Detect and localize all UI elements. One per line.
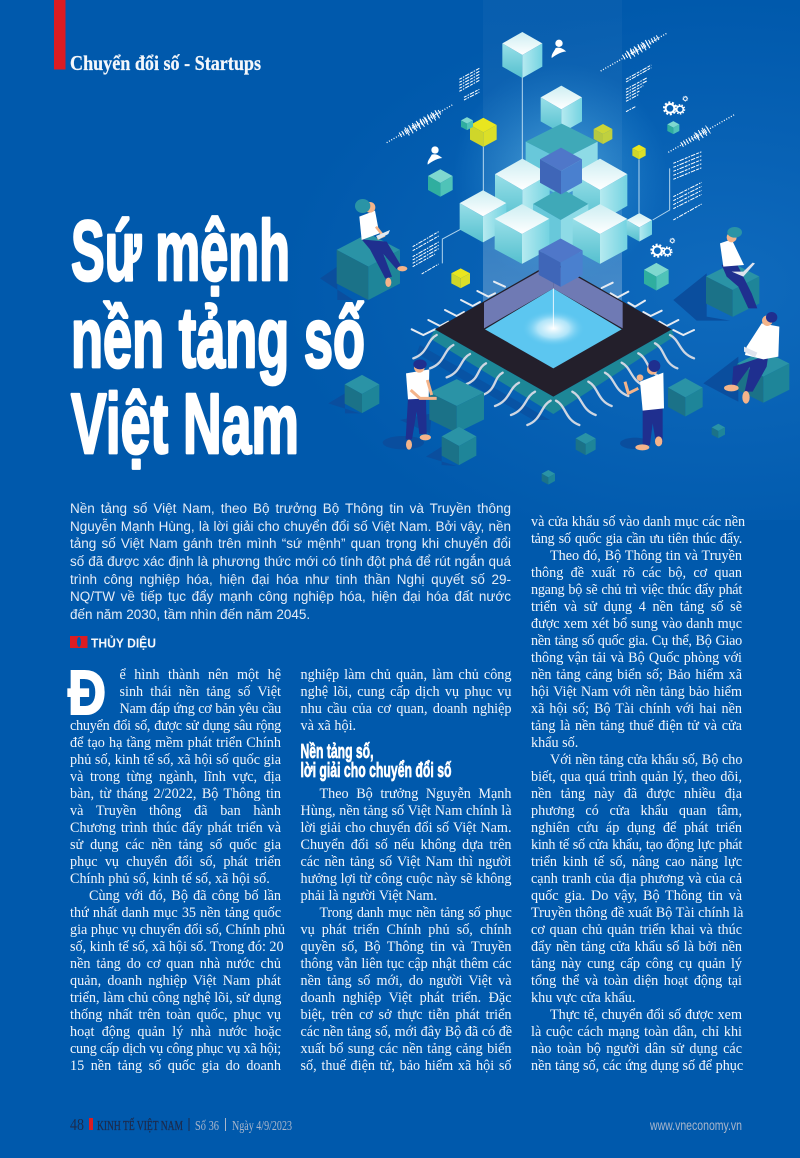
intro text: Nền tảng số Việt Nam, theo Bộ trưởng Bộ Thông tin và Truyền thông (70, 501, 511, 516)
intro text: đến năm 2030, tầm nhìn đến năm 2045. (70, 607, 310, 622)
body column 2, bottom: thông vẫn liên tục cập nhật thêm các (300, 956, 512, 972)
body column 1: bàn, từ tháng 2/2022, Bộ Thông tin (70, 786, 281, 802)
body column 3: tảng số quốc gia cần ưu tiên thúc đẩy. (531, 531, 742, 547)
body column 3: Theo đó, Bộ Thông tin và Truyền (550, 548, 742, 564)
chip glowing floor (485, 288, 622, 368)
floating cube: second (541, 86, 582, 133)
body column 3: xã hội số; Bộ Tài chính với hai nền (531, 701, 742, 717)
body column 2, bottom: phải là người Việt Nam. (300, 888, 437, 904)
body column 1: thống nhất trên toàn quốc, phục vụ (70, 1007, 281, 1023)
body column 1: nền tảng do cơ quan nhà nước chủ (70, 956, 281, 972)
body column 1: số, kinh tế số, xã hội số. Trong đó: 20 (70, 939, 284, 955)
green cube right small (667, 121, 679, 134)
intro text: trình công nghiệp hóa, hiện đại hóa như tinh thần Nghị quyết số 29- (70, 572, 511, 587)
body column 2, bottom: số, thuế điện tử, bảo hiểm xã hội số (300, 1058, 512, 1074)
background glow (0, 0, 800, 520)
body column 2, bottom: xuất bổ sung các nền tảng cảng biển (300, 1041, 512, 1057)
main title: Việt Nam (71, 377, 299, 472)
lime cube right (594, 124, 612, 144)
body column 2, top: và xã hội. (300, 718, 356, 734)
light beam (483, 0, 622, 330)
chip pins, bottom (413, 335, 694, 425)
body column 1: triển, làm chủ công nghệ lõi, sử dụng (70, 990, 281, 1006)
body column 2, bottom: biệt, trên cơ sở thực tiễn phát triển (300, 1007, 512, 1023)
body column 3: kinh tế số cửa khẩu, tạo động lực phát (531, 837, 742, 853)
front left cube (495, 204, 549, 264)
subheading: Nền tảng số, (300, 741, 374, 763)
body column 1: phục vụ chuyển đổi số, phát triển (70, 854, 281, 870)
person seated, far right (703, 312, 789, 404)
body column 3: đẩy nền tảng cửa khẩu số là bởi nền (531, 939, 742, 955)
body column 1: sử dụng các nền tảng số quốc gia (70, 837, 281, 853)
body column 1: Nam đáp ứng cơ bản yêu cầu (120, 701, 281, 717)
body column 1: Chính phủ số, kinh tế số, xã hội số. (70, 871, 270, 887)
body column 3: triển kinh tế số, nâng cao năng lực (531, 854, 742, 870)
body column 1: thứ nhất danh mục 35 nền tảng quốc (70, 905, 281, 921)
body column 2, top: nghiệp làm chủ quản, làm chủ công (300, 667, 512, 683)
body column 3: nghiên cứu áp dụng để phát triển (531, 820, 742, 836)
intro text: Nguyễn Mạnh Hùng, là lời giải cho chuyển đổi số Việt Nam. Bởi vậy, nền (70, 519, 511, 534)
body column 1: sinh thái nền tảng số Việt (120, 684, 281, 700)
body column 3: biết, qua quá trình quản lý, theo dõi, (531, 769, 742, 785)
body column 3: thông đề xuất rõ các bộ, cơ quan (531, 565, 742, 581)
chip base (430, 329, 674, 414)
body column 2, bottom: các nền tảng số Việt Nam thì người (300, 854, 512, 870)
body column 2, bottom: lời giải cho chuyển đổi số Việt Nam. (300, 820, 512, 836)
intro text (70, 501, 511, 622)
body column 3: Với nền tảng cửa khẩu số, Bộ cho (550, 752, 742, 768)
purple walls (484, 263, 553, 328)
intro text: NQ/TW về tiếp tục đẩy mạnh công nghiệp hóa, hiện đại hóa đất nước (70, 589, 511, 604)
footer: Số 36 (195, 1119, 219, 1134)
drop cap: Đ (68, 659, 106, 728)
body column 3: và cửa khẩu số vào danh mục các nền (531, 514, 745, 530)
main title: nền tảng số (71, 291, 365, 386)
body column 1: Cùng với đó, Bộ đã công bố lần (89, 888, 281, 904)
connector lines (442, 77, 670, 263)
body column 3 (531, 514, 745, 1074)
red section bar (54, 0, 66, 70)
chip top (435, 262, 672, 397)
floating cube: top (502, 32, 542, 78)
body column 3: là cuộc cách mạng toàn dân, chỉ khi (531, 1024, 742, 1040)
body column 3: nền tảng này đã được nhiều địa (531, 786, 742, 802)
body column 2, bottom: doanh nghiệp Việt phát triển. Đặc (300, 990, 512, 1006)
body column 2, bottom: vụ phát triển Chính phủ số, chính (300, 922, 512, 938)
green cube left (428, 169, 453, 197)
yellow hex cube (470, 118, 497, 147)
body column 3: Thực tế, chuyển đổi số được xem (550, 1007, 742, 1023)
body column 1: hoạt động quản lý nhà nước hoặc (70, 1024, 281, 1040)
body column 2, bottom: hưởng lợi từ công cuộc này sẽ không (300, 871, 512, 887)
body column 1: và Truyền thông đã ban hành (70, 803, 281, 819)
person on cube with laptop, right (673, 227, 759, 321)
body column 1: chuyển đổi số, được sử dụng sâu rộng (70, 718, 281, 734)
blue cube lower (539, 239, 583, 287)
body column 2, bottom: Hùng, nền tảng số Việt Nam chính là (300, 803, 512, 819)
body column 3: Truyền thông đề xuất Bộ Tài chính là (531, 905, 743, 921)
body column 3: khu vực cửa khẩu. (531, 990, 635, 1006)
body column 3: nào toàn bộ người dân sử dụng các (531, 1041, 742, 1057)
data waves (387, 33, 735, 152)
body column 3: triển và sử dụng 4 nền tảng số sẽ (531, 599, 742, 615)
body column 3: nền tảng số, các ứng dụng số để phục (531, 1058, 743, 1074)
footer: 48 (70, 1115, 84, 1134)
chip pins, top (412, 282, 694, 335)
body column 1: ể hình thành nên một hệ (120, 667, 281, 683)
body column 1: quản, doanh nghiệp Việt Nam phát (70, 973, 281, 989)
body column 2, bottom: Chuyển đổi số nếu không dựa trên (300, 837, 512, 853)
person standing, right (620, 360, 664, 450)
central cube (533, 188, 588, 252)
lime cube lower (451, 268, 470, 288)
body column 2, bottom: quyền số, Bộ Thông tin và Truyền (300, 939, 512, 955)
intro text: tảng số Việt Nam gánh trên mình “sứ mệnh” quan trọng khi chuyển đổi (70, 536, 511, 551)
byline: THỦY DIỆU (91, 636, 156, 650)
glow behind the cubes (453, 63, 667, 283)
main title (71, 204, 365, 472)
body column 1: 15 nền tảng số quốc gia do doanh (70, 1058, 281, 1074)
small text blocks (413, 65, 702, 274)
blue cube upper (540, 148, 582, 194)
person standing, left (383, 359, 437, 450)
body column 1: và trong từng ngành, lĩnh vực, địa (70, 769, 281, 785)
front right cube (573, 204, 627, 264)
large back cube (526, 124, 598, 196)
body column 3: được xem xét bổ sung vào danh mục (531, 616, 742, 632)
main title: Sứ mệnh (71, 204, 290, 299)
footer: Ngày 4/9/2023 (232, 1119, 292, 1134)
body column 2, top: nhu cầu của cơ quan, doanh nghiệp (300, 701, 512, 717)
intro text: số đã được xác định là phương thức mới có tính đột phá để rút ngắn quá (70, 554, 511, 569)
body column 3: hội Việt Nam với nền tảng bảo hiểm (531, 684, 742, 700)
body column 2, bottom: Theo Bộ trưởng Nguyễn Mạnh (320, 786, 512, 802)
body column 3: tổng thể và toàn diện hoạt động tại (531, 973, 742, 989)
body column 1: Chương trình thúc đẩy phát triển và (70, 820, 281, 836)
body column 3: cơ quan chủ quản triển khai và thúc (531, 922, 742, 938)
body column 3: ngang bộ sẽ chủ trì việc thúc đẩy phát (531, 582, 742, 598)
left cube (460, 190, 506, 242)
cube cluster and data (zoom coordinates) (320, 32, 759, 321)
body column 3: tảng này cung cấp công cụ quản lý (531, 956, 742, 972)
body column 3: nền tảng cảng biển số; Bảo hiểm xã (531, 667, 742, 683)
body column 1: phủ số, kinh tế số, xã hội số quốc gia (70, 752, 281, 768)
body column 3: quốc gia. Do vậy, Bộ Thông tin và (531, 888, 742, 904)
person on cube, left (320, 199, 407, 300)
middle left cube (495, 159, 550, 221)
footer (70, 1115, 742, 1134)
section label: Chuyển đổi số - Startups (70, 51, 261, 75)
icons: users (428, 40, 566, 165)
body column 1 (70, 667, 285, 1074)
lime cube small (632, 145, 646, 159)
green cube right lower (644, 263, 669, 290)
body column 2, bottom (300, 786, 512, 1074)
body column 3: cạnh tranh của địa phương và của cả (531, 871, 742, 887)
body column 3: khẩu số. (531, 735, 578, 751)
body column 1: gia phục vụ chuyển đổi số, Chính phủ (70, 922, 285, 938)
body column 1: cung cấp dịch vụ công phục vụ xã hội; (70, 1041, 281, 1057)
body column 2, bottom: nền tảng số mới, do người Việt và (300, 973, 512, 989)
body column 2, top: nghệ lõi, cung cấp dịch vụ phục vụ (300, 684, 512, 700)
body column 3: tảng là nền tảng thuế điện tử và cửa (531, 718, 742, 734)
subheading (300, 741, 452, 782)
middle right cube (573, 159, 627, 221)
body column 3: nền tảng số quốc gia. Cụ thể, Bộ Giao (531, 633, 742, 649)
teal cubes (328, 375, 725, 485)
body column 2, bottom: Trong danh mục nền tảng số phục (320, 905, 512, 921)
subheading: lời giải cho chuyển đổi số (300, 760, 452, 782)
body column 3: phương có cửa khẩu quan tâm, (531, 803, 742, 819)
microchip (328, 239, 789, 485)
body column 1: để tạo hạ tầng mềm phát triển Chính (70, 735, 281, 751)
footer: www.vneconomy.vn (649, 1118, 742, 1133)
footer: KINH TẾ VIỆT NAM (97, 1117, 183, 1134)
icons: gears (651, 96, 688, 257)
small right white cube (627, 213, 652, 242)
body column 2, top (300, 667, 512, 734)
small teal cube (461, 117, 473, 130)
body column 2, bottom: các nền tảng số, mới đây Bộ đã có đề (300, 1024, 512, 1040)
body column 3: thông vận tải và Bộ Quốc phòng với (531, 650, 742, 666)
